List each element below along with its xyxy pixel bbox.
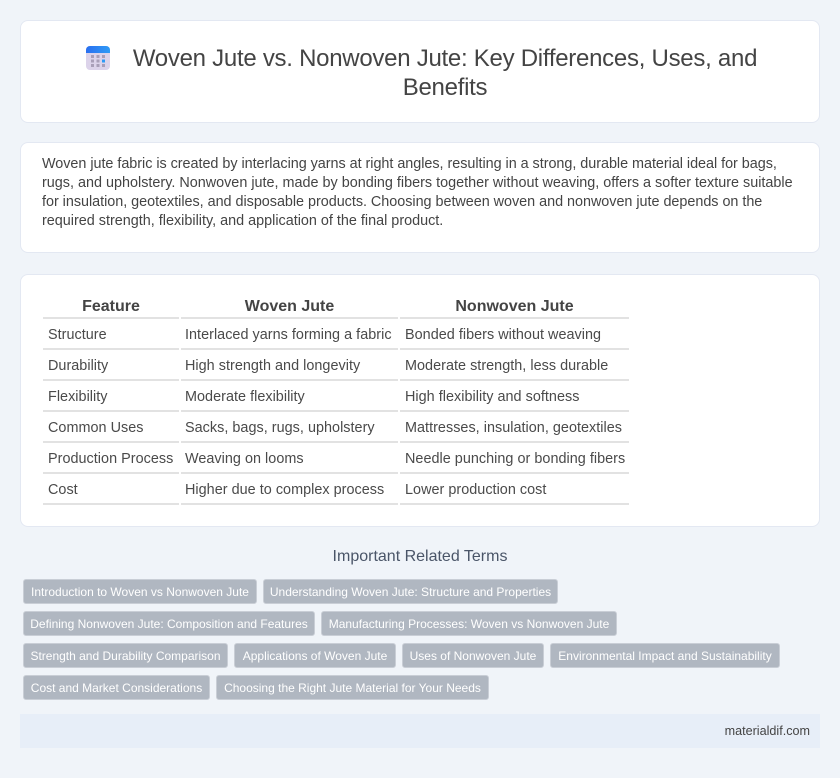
comparison table: Moderate strength, less durable <box>405 358 608 374</box>
comparison table: Weaving on looms <box>185 451 304 467</box>
comparison table: Moderate flexibility <box>185 389 305 405</box>
comparison table: Cost <box>48 482 78 498</box>
related terms tags: Strength and Durability Comparison <box>30 649 221 663</box>
related terms tags: Environmental Impact and Sustainability <box>558 649 772 663</box>
comparison table: Sacks, bags, rugs, upholstery <box>185 420 375 436</box>
related terms tags: Choosing the Right Jute Material for Your Needs <box>224 681 481 695</box>
related terms tags: Introduction to Woven vs Nonwoven Jute <box>31 585 249 599</box>
title: Woven Jute vs. Nonwoven Jute: Key Differences, Uses, and <box>133 45 757 72</box>
comparison table: Production Process <box>48 451 173 467</box>
comparison table: High flexibility and softness <box>405 389 579 405</box>
related terms tags: Uses of Nonwoven Jute <box>410 649 536 663</box>
comparison table: Structure <box>48 327 107 343</box>
comparison table: Lower production cost <box>405 482 546 498</box>
comparison table: Needle punching or bonding fibers <box>405 451 625 467</box>
related terms tags: Understanding Woven Jute: Structure and Properties <box>270 585 551 599</box>
related terms tags <box>23 579 780 700</box>
comparison table: Feature <box>82 298 140 315</box>
panel: header card <box>20 20 820 123</box>
text block: intro paragraph: Woven jute fabric is created by interlacing yarns at right angles, resulting in a strong, durable material ideal for bags, <box>42 156 777 172</box>
text block: intro paragraph: rugs, and upholstery. Nonwoven jute, made by bonding fibers together without weaving, offers a softer texture suitable <box>42 175 793 191</box>
icon: calendar <box>86 46 110 70</box>
comparison table: Flexibility <box>48 389 108 405</box>
footer: site name: materialdif.com <box>725 724 810 738</box>
title: Benefits <box>403 74 487 101</box>
comparison table: Nonwoven Jute <box>455 298 574 315</box>
related terms tags: Applications of Woven Jute <box>243 649 387 663</box>
title <box>133 45 757 101</box>
comparison table: Interlaced yarns forming a fabric <box>185 327 392 343</box>
panel: intro paragraph card <box>20 142 820 253</box>
panel: table card <box>20 274 820 527</box>
comparison table: Durability <box>48 358 108 374</box>
comparison table: Mattresses, insulation, geotextiles <box>405 420 622 436</box>
comparison table: Bonded fibers without weaving <box>405 327 601 343</box>
comparison table: High strength and longevity <box>185 358 360 374</box>
related terms tags: Defining Nonwoven Jute: Composition and Features <box>30 617 308 631</box>
comparison table: Higher due to complex process <box>185 482 384 498</box>
text block: intro paragraph: required strength, flexibility, and application of the final product. <box>42 213 443 229</box>
comparison table: Common Uses <box>48 420 144 436</box>
comparison table: Woven Jute <box>245 298 334 315</box>
text block: intro paragraph: for insulation, geotextiles, and disposable products. Choosing between woven and nonwoven jute depends on the <box>42 194 762 210</box>
related terms tags: Manufacturing Processes: Woven vs Nonwoven Jute <box>329 617 609 631</box>
footer bar <box>20 714 820 748</box>
text block: intro paragraph <box>42 156 793 229</box>
related terms tags: Cost and Market Considerations <box>31 681 202 695</box>
heading: important related terms: Important Related Terms <box>333 548 507 565</box>
